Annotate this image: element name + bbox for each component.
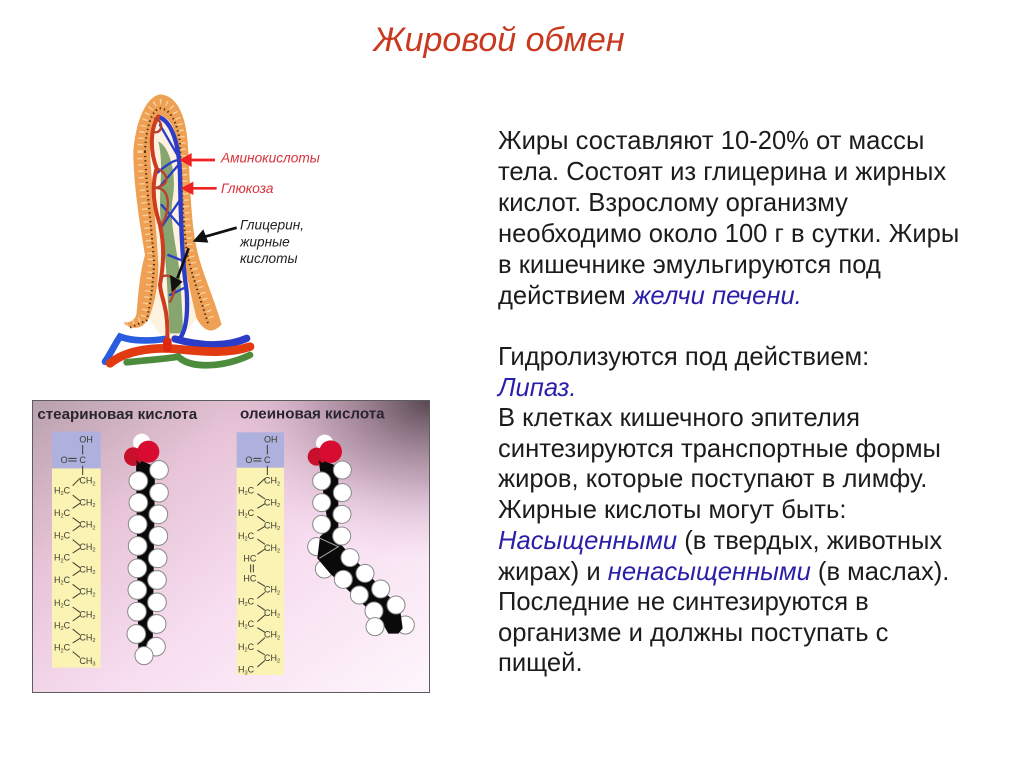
stearic acid formula: H: [54, 575, 60, 585]
title: Жировой обмен: [373, 21, 625, 59]
oleic acid formula: C: [248, 508, 255, 518]
label: glycerol and fatty acids: жирные: [239, 234, 290, 249]
stearic acid formula: 2: [60, 604, 64, 610]
stearic acid formula: C: [64, 553, 71, 563]
oleic acid formula: C: [264, 455, 271, 465]
arterial network: [152, 117, 175, 342]
stearic acid formula: CH: [79, 609, 92, 619]
stearic acid formula: 2: [60, 558, 64, 564]
villus epithelium: [123, 94, 222, 338]
stearic acid formula: 2: [60, 491, 64, 497]
venous network: [105, 117, 247, 362]
text block: fat composition and emulsification: [498, 127, 959, 310]
stearic acid formula: CH: [79, 497, 92, 507]
oleic acid formula: CH: [264, 476, 277, 486]
stearic acid formula: CH: [79, 656, 92, 666]
stearic acid formula: C: [64, 485, 71, 495]
oleic acid formula: 2: [244, 514, 248, 520]
stearic acid formula: CH: [79, 587, 92, 597]
stearic acid formula: C: [64, 598, 71, 608]
text block: hydrolysis and fatty acids: [496, 343, 949, 677]
stearic acid formula: CH: [79, 632, 92, 642]
stearic acid formula: 2: [92, 548, 95, 554]
stearic acid formula: 2: [92, 615, 95, 621]
text block: hydrolysis and fatty acids: Жирные кислоты могут быть:: [498, 496, 846, 524]
stearic acid formula: 2: [92, 570, 95, 576]
oleic acid formula: 2: [277, 590, 280, 596]
stearic acid formula: C: [79, 455, 86, 465]
oleic acid formula: CH: [264, 543, 277, 553]
text block: hydrolysis and fatty acids: пищей.: [498, 649, 583, 677]
stearic acid formula: H: [54, 620, 60, 630]
text block: hydrolysis and fatty acids: Липаз.: [498, 374, 577, 402]
stearic acid formula: O: [61, 455, 68, 465]
oleic acid formula: HC: [243, 573, 257, 583]
oleic acid formula: H: [238, 665, 244, 675]
oleic acid formula: HC: [243, 553, 257, 563]
stearic acid formula: 2: [92, 525, 95, 531]
oleic acid formula: C: [248, 665, 255, 675]
stearic acid formula: C: [64, 508, 71, 518]
oleic acid formula: C: [248, 619, 255, 629]
text block: hydrolysis and fatty acids: жирах) и ненасыщенными (в маслах).: [498, 558, 949, 586]
stearic acid formula: 2: [92, 592, 95, 598]
oleic acid formula: C: [248, 642, 255, 652]
oleic acid formula: 2: [277, 549, 280, 555]
text block: fat composition and emulsification: в кишечнике эмульгируются под: [498, 251, 881, 279]
illustration: intestinal villus: [105, 94, 320, 365]
stearic acid formula: CH: [79, 564, 92, 574]
stearic acid formula: H: [54, 643, 60, 653]
text block: fat composition and emulsification: действием желчи печени.: [498, 282, 802, 310]
stearic acid formula: H: [54, 553, 60, 563]
oleic acid formula: 2: [277, 526, 280, 532]
stearic acid formula: CH: [79, 476, 92, 486]
stearic acid formula: H: [54, 508, 60, 518]
oleic acid formula: CH: [264, 653, 277, 663]
stearic acid formula: C: [64, 575, 71, 585]
text block: fat composition and emulsification: необходимо около 100 г в сутки. Жиры: [498, 220, 959, 248]
oleic acid formula: H: [238, 508, 244, 518]
stearic acid formula: C: [64, 620, 71, 630]
lacteal: [158, 142, 183, 333]
oleic acid formula: H: [238, 596, 244, 606]
oleic acid formula: CH: [264, 497, 277, 507]
text block: fat composition and emulsification: кислот. Взрослому организму: [498, 189, 848, 217]
oleic acid formula: 2: [244, 602, 248, 608]
stearic acid molecule model: [124, 434, 168, 665]
oleic acid heading: олеиновая кислота: [240, 405, 385, 422]
oleic acid formula: O: [245, 455, 252, 465]
oleic acid formula: 2: [244, 491, 248, 497]
stearic acid formula: [52, 432, 101, 668]
oleic acid formula: 3: [244, 670, 248, 676]
oleic acid formula: 2: [244, 537, 248, 543]
oleic acid formula: 2: [277, 481, 280, 487]
oleic acid molecule model: [308, 435, 414, 636]
stearic acid formula: H: [54, 598, 60, 608]
oleic acid formula: C: [248, 596, 255, 606]
oleic acid formula: OH: [264, 434, 277, 444]
panel: fatty acids: [32, 400, 430, 692]
stearic acid formula: H: [54, 530, 60, 540]
oleic acid formula: C: [248, 485, 255, 495]
oleic acid formula: [237, 432, 284, 676]
stearic acid formula: 2: [60, 536, 64, 542]
inner black arrow: [170, 248, 189, 292]
label: amino acids: Аминокислоты: [220, 150, 320, 165]
stearic acid formula: C: [64, 530, 71, 540]
stearic acid formula: 3: [92, 662, 95, 668]
arrow: glycerol and fatty acids: [193, 228, 237, 243]
oleic acid formula: CH: [264, 608, 277, 618]
oleic acid formula: CH: [264, 630, 277, 640]
arteries and lymph vessel at base: [110, 342, 250, 365]
stearic acid formula: OH: [79, 435, 93, 445]
stearic acid formula: 2: [60, 581, 64, 587]
oleic acid formula: CH: [264, 520, 277, 530]
oleic acid formula: H: [238, 531, 244, 541]
oleic acid formula: 2: [277, 614, 280, 620]
text block: hydrolysis and fatty acids: Гидролизуются под действием:: [498, 343, 869, 371]
arrow: amino acids: [179, 153, 215, 167]
oleic acid formula: CH: [264, 585, 277, 595]
oleic acid formula: H: [238, 642, 244, 652]
oleic acid formula: C: [248, 531, 255, 541]
label: glycerol and fatty acids: Глицерин,: [240, 218, 304, 233]
text block: hydrolysis and fatty acids: Насыщенными (в твердых, животных: [498, 527, 942, 555]
arrow: glucose: [181, 182, 217, 195]
oleic acid formula: 2: [277, 635, 280, 641]
stearic acid formula: 2: [60, 514, 64, 520]
label: glucose: Глюкоза: [221, 181, 274, 196]
text block: fat composition and emulsification: тела. Состоят из глицерина и жирных: [498, 158, 946, 186]
stearic acid formula: 2: [60, 626, 64, 632]
stearic acid formula: CH: [79, 520, 92, 530]
stearic acid formula: CH: [79, 542, 92, 552]
stearic acid formula: 2: [92, 503, 95, 509]
oleic acid: [237, 405, 414, 676]
oleic acid formula: H: [238, 619, 244, 629]
text block: hydrolysis and fatty acids: организме и должны поступать с: [498, 619, 888, 647]
oleic acid formula: 2: [277, 503, 280, 509]
text block: hydrolysis and fatty acids: синтезируются транспортные формы: [498, 435, 941, 463]
stearic acid formula: 2: [92, 481, 95, 487]
oleic acid formula: 2: [244, 625, 248, 631]
stearic acid: [37, 406, 198, 668]
oleic acid formula: 2: [277, 659, 280, 665]
stearic acid formula: C: [64, 643, 71, 653]
oleic acid formula: H: [238, 485, 244, 495]
stearic acid formula: H: [54, 485, 60, 495]
stearic acid formula: 2: [60, 648, 64, 654]
stearic acid formula: 2: [92, 638, 95, 644]
text block: hydrolysis and fatty acids: В клетках кишечного эпителия: [498, 404, 860, 432]
text block: fat composition and emulsification: Жиры составляют 10-20% от массы: [498, 127, 924, 155]
label: glycerol and fatty acids: кислоты: [240, 251, 298, 266]
stearic acid heading: стеариновая кислота: [37, 406, 198, 423]
panel background: [32, 400, 430, 692]
text block: hydrolysis and fatty acids: Последние не синтезируются в: [498, 588, 869, 616]
oleic acid formula: 2: [244, 648, 248, 654]
text block: hydrolysis and fatty acids: жиров, которые поступают в лимфу.: [498, 465, 927, 493]
